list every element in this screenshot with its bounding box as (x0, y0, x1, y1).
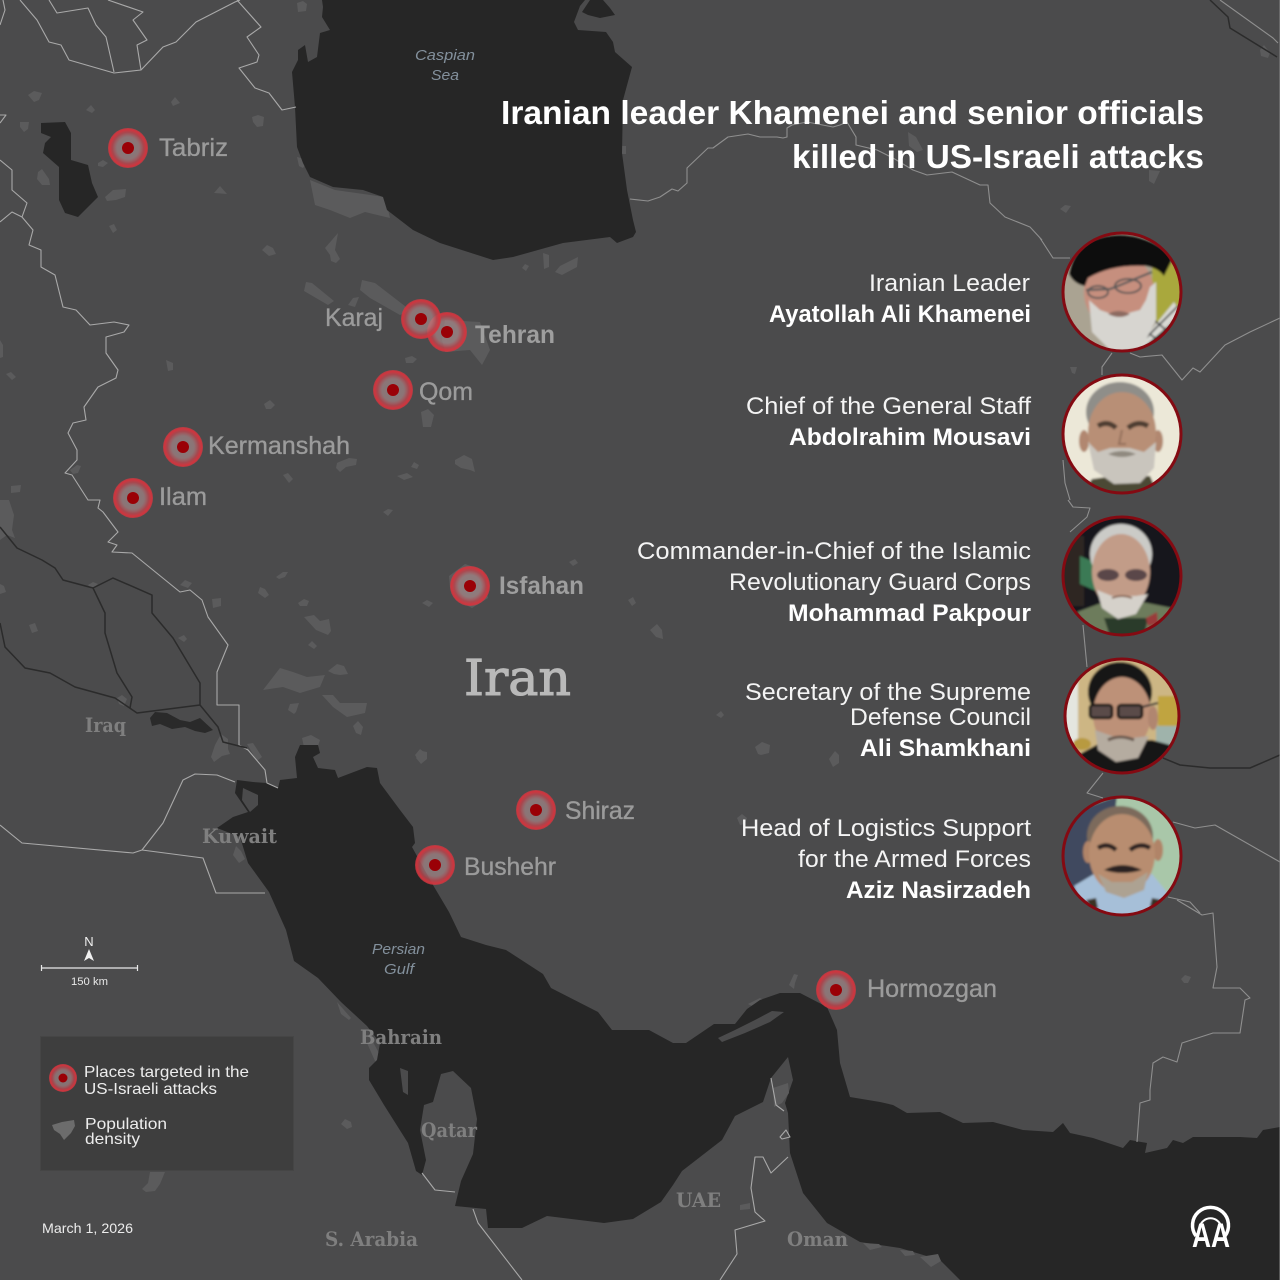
water: marshes (150, 712, 213, 733)
text: Nasirzadeh: Aziz Nasirzadeh (846, 877, 1031, 904)
eastern and northern borders of Iran (630, 0, 1280, 1142)
legend (40, 1036, 294, 1170)
scale bar and north arrow (42, 934, 138, 988)
text: Khamenei: Iranian Leader (869, 270, 1030, 297)
right edge line (1279, 0, 1280, 1280)
marker: Isfahan: Isfahan (499, 572, 584, 600)
country label: Kuwait: Kuwait (202, 824, 278, 848)
marker: Tehran (427, 312, 555, 352)
text: Nasirzadeh (741, 815, 1031, 904)
coastal population on Oman and Musandam (773, 1083, 941, 1267)
logo: Anadolu Agency (1192, 1207, 1230, 1255)
legend: population text: Population (85, 1116, 167, 1133)
text: Khamenei (769, 270, 1031, 328)
marker: Karaj (325, 299, 441, 339)
marker: Ilam: Ilam (159, 483, 207, 511)
legend: population swatch (52, 1120, 75, 1140)
text: Mousavi: Chief of the General Staff (746, 393, 1031, 420)
text: Shamkhani: Ali Shamkhani (860, 735, 1031, 762)
scale bar and north arrow: 150 km (71, 976, 108, 988)
marker: Tehran: Tehran (475, 321, 555, 349)
date: March 1, 2026 (42, 1220, 133, 1236)
islands: Bubiyan, Qeshm, Bahrain (242, 788, 784, 1095)
sea label: Caspian Sea (415, 47, 475, 84)
marker: Kermanshah (163, 427, 350, 467)
text: Shamkhani: Secretary of the Supreme (745, 679, 1031, 706)
legend: target text: US-Israeli attacks (84, 1081, 217, 1098)
legend: target text: Places targeted in the (84, 1064, 249, 1081)
title: Iranian leader Khamenei and senior officials (501, 94, 1204, 131)
sea label: Caspian Sea: Caspian (415, 47, 475, 64)
legend: population text: density (85, 1131, 140, 1148)
sea label: Persian Gulf (372, 941, 425, 978)
water: Caspian Sea (292, 0, 636, 260)
marker: Ilam (113, 478, 207, 518)
marker: Bushehr: Bushehr (464, 853, 556, 881)
water: Lake Urmia (41, 122, 98, 217)
title (501, 94, 1204, 175)
legend: target marker (49, 1064, 77, 1092)
country label: Oman: Oman (787, 1227, 848, 1251)
marker: Hormozgan: Hormozgan (867, 975, 997, 1003)
text: Nasirzadeh: Head of Logistics Support (741, 815, 1031, 842)
marker: Hormozgan (816, 970, 997, 1010)
marker: Kermanshah: Kermanshah (208, 432, 350, 460)
country label: Iraq: Iraq (85, 713, 126, 737)
marker: Shiraz: Shiraz (565, 797, 635, 825)
portrait: Khamenei (1062, 232, 1182, 352)
marker: Tabriz: Tabriz (159, 134, 228, 162)
sea label: Persian Gulf: Gulf (384, 961, 416, 978)
text: Pakpour: Mohammad Pakpour (788, 600, 1031, 627)
country borders (0, 0, 790, 1280)
marker: Bushehr (415, 845, 556, 885)
text: Nasirzadeh: for the Armed Forces (798, 846, 1031, 873)
marker: Isfahan (450, 566, 584, 606)
country label: Iran: Iran (464, 649, 571, 707)
portrait: Pakpour (1062, 516, 1182, 636)
marker: Shiraz (516, 790, 635, 830)
country label: S. Arabia: S. Arabia (325, 1227, 418, 1251)
marker: Qom (373, 370, 473, 410)
text: Mousavi (746, 393, 1031, 451)
country label: Bahrain: Bahrain (360, 1025, 442, 1049)
portrait: Mousavi (1062, 374, 1182, 494)
marker: Qom: Qom (419, 378, 473, 406)
sea label: Persian Gulf: Persian (372, 941, 425, 958)
sea label: Caspian Sea: Sea (431, 67, 459, 84)
portrait: Nasirzadeh (1062, 796, 1182, 916)
text: Pakpour: Revolutionary Guard Corps (729, 569, 1031, 596)
country label: UAE: UAE (676, 1188, 721, 1212)
text: Shamkhani (745, 679, 1031, 762)
country label: Qatar: Qatar (421, 1118, 477, 1142)
text: Pakpour: Commander-in-Chief of the Islamic (637, 538, 1031, 565)
legend: target text (84, 1064, 249, 1098)
marker: Karaj: Karaj (325, 304, 383, 332)
portrait: Shamkhani (1062, 656, 1182, 776)
text: Khamenei: Ayatollah Ali Khamenei (769, 301, 1031, 328)
text: Shamkhani: Defense Council (850, 704, 1031, 731)
marker: Tabriz (108, 128, 228, 168)
water: Persian Gulf and Gulf of Oman (217, 745, 1280, 1280)
logo: Anadolu Agency: AA (1192, 1217, 1230, 1255)
title: killed in US-Israeli attacks (792, 138, 1204, 175)
text: Pakpour (637, 538, 1031, 627)
legend: population text (85, 1116, 167, 1148)
scale bar and north arrow: N (84, 934, 94, 949)
rivers (0, 0, 1280, 768)
text: Mousavi: Abdolrahim Mousavi (789, 424, 1031, 451)
